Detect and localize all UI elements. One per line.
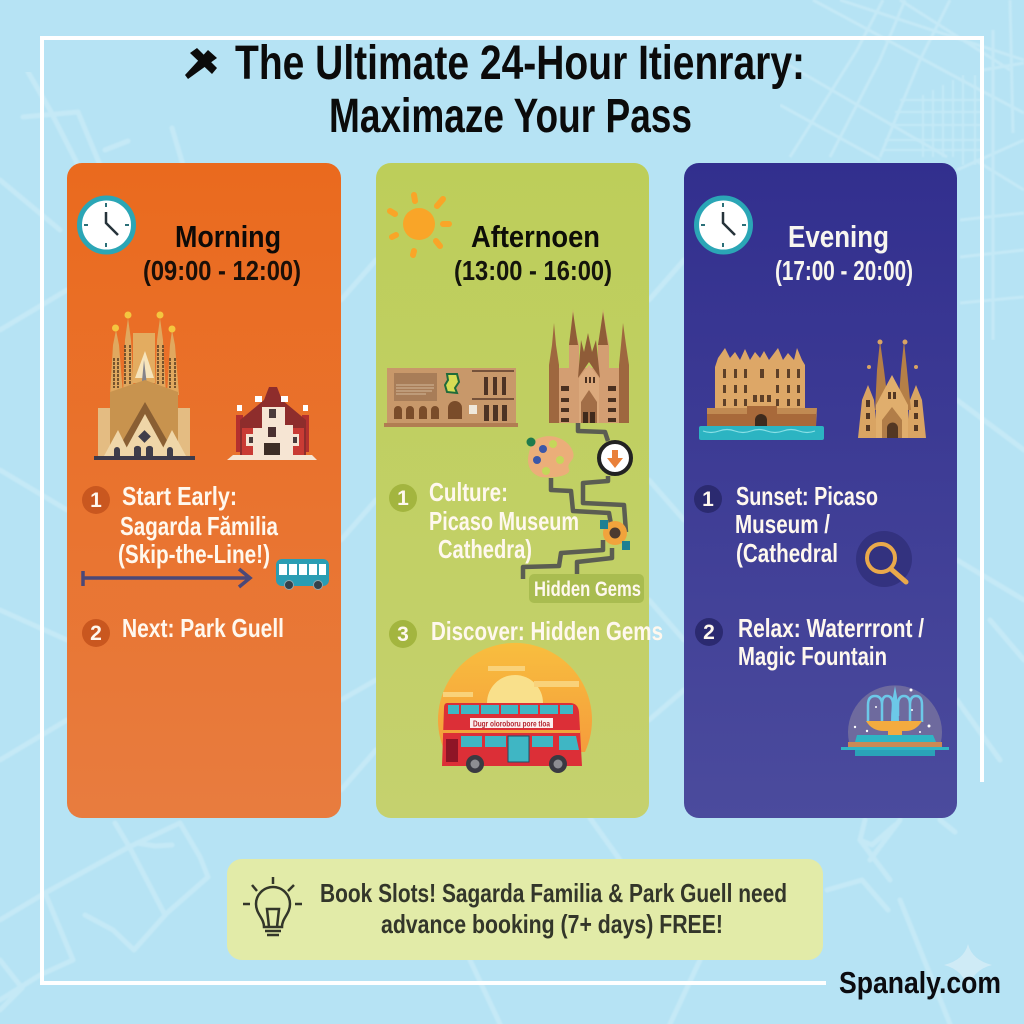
step 2: relax: Magic Fountain — [738, 641, 887, 671]
step 1: culture — [389, 477, 579, 564]
decorative star watermark — [944, 944, 992, 990]
step 2: relax: 2 — [703, 621, 715, 644]
step 1: start early: Start Early: — [122, 481, 237, 511]
heading: evening: Evening — [788, 219, 889, 254]
step 2: next park guell — [82, 613, 284, 647]
panel: morning — [67, 163, 341, 818]
illustration: double-decker bus at sunset: Dugr oloroboru pore tloa — [473, 720, 550, 728]
step 1: culture: 1 — [397, 487, 409, 510]
step 3: discover — [389, 616, 663, 648]
heading: afternoon: Afternoen — [471, 219, 600, 254]
arrow: route to bus — [83, 569, 250, 587]
tag: hidden gems — [529, 574, 644, 603]
time range: afternoon: (13:00 - 16:00) — [454, 255, 612, 286]
icon: magnifying glass — [856, 531, 912, 587]
step 1: culture: Culture: — [429, 477, 508, 507]
brand: spanaly.com: Spanaly.com — [839, 965, 1001, 1000]
step 1: sunset: 1 — [702, 488, 714, 511]
step 1: start early: (Skip-the-Line!) — [118, 539, 270, 569]
step 3: discover: Discover: Hidden Gems — [431, 616, 663, 646]
step 1: sunset: Sunset: Picaso — [736, 481, 878, 511]
illustration: museum — [384, 368, 518, 427]
step 1: start early: 1 — [90, 489, 102, 512]
title — [185, 37, 805, 143]
step 1: culture: Picaso Museum — [429, 506, 579, 536]
icon: clock — [696, 198, 750, 252]
icon: sun — [390, 195, 449, 255]
heading: morning: Morning — [175, 219, 281, 254]
title: Maximaze Your Pass — [329, 90, 692, 143]
callout: book slots: advance booking (7+ days) FREE! — [381, 909, 723, 939]
step 1: sunset — [694, 481, 878, 568]
panel: afternoon — [376, 163, 663, 818]
icon: palette — [526, 436, 574, 478]
callout: book slots: Book Slots! Sagarda Familia & Park Guell need — [320, 878, 787, 908]
illustration: palace on water — [699, 348, 824, 440]
illustration: Park Guell house — [227, 387, 317, 460]
icon: clock — [80, 198, 134, 252]
step 1: start early — [82, 481, 278, 569]
tag: hidden gems: Hidden Gems — [534, 578, 641, 601]
illustration: magic fountain — [841, 685, 949, 756]
illustration: Sagrada Familia — [94, 312, 195, 460]
panel: evening — [684, 163, 957, 818]
title: The Ultimate 24-Hour Itienrary: — [235, 37, 805, 90]
illustration: double-decker bus at sunset — [438, 643, 592, 773]
icon: down arrow pin — [599, 442, 631, 474]
illustration: evening cathedral — [858, 340, 926, 438]
step 2: next park guell: 2 — [90, 622, 102, 645]
time range: evening: (17:00 - 20:00) — [775, 255, 913, 286]
step 1: culture: Cathedra) — [438, 534, 532, 564]
step 1: sunset: (Cathedral — [736, 538, 838, 568]
illustration: cathedral — [549, 309, 629, 423]
icon: route node — [600, 520, 630, 550]
callout: book slots — [227, 859, 823, 960]
step 2: relax: Relax: Waterrront / — [738, 613, 924, 643]
icon: light bulb — [243, 877, 302, 935]
map route with pins — [523, 423, 631, 579]
step 1: start early: Sagarda Fămilia — [120, 511, 278, 541]
step 3: discover: 3 — [397, 623, 409, 646]
icon: bus — [276, 559, 329, 590]
step 2: next park guell: Next: Park Guell — [122, 613, 284, 643]
icon: hammer — [185, 48, 217, 79]
time range: morning: (09:00 - 12:00) — [143, 255, 301, 286]
step 1: sunset: Museum / — [735, 509, 830, 539]
step 2: relax — [695, 613, 924, 671]
